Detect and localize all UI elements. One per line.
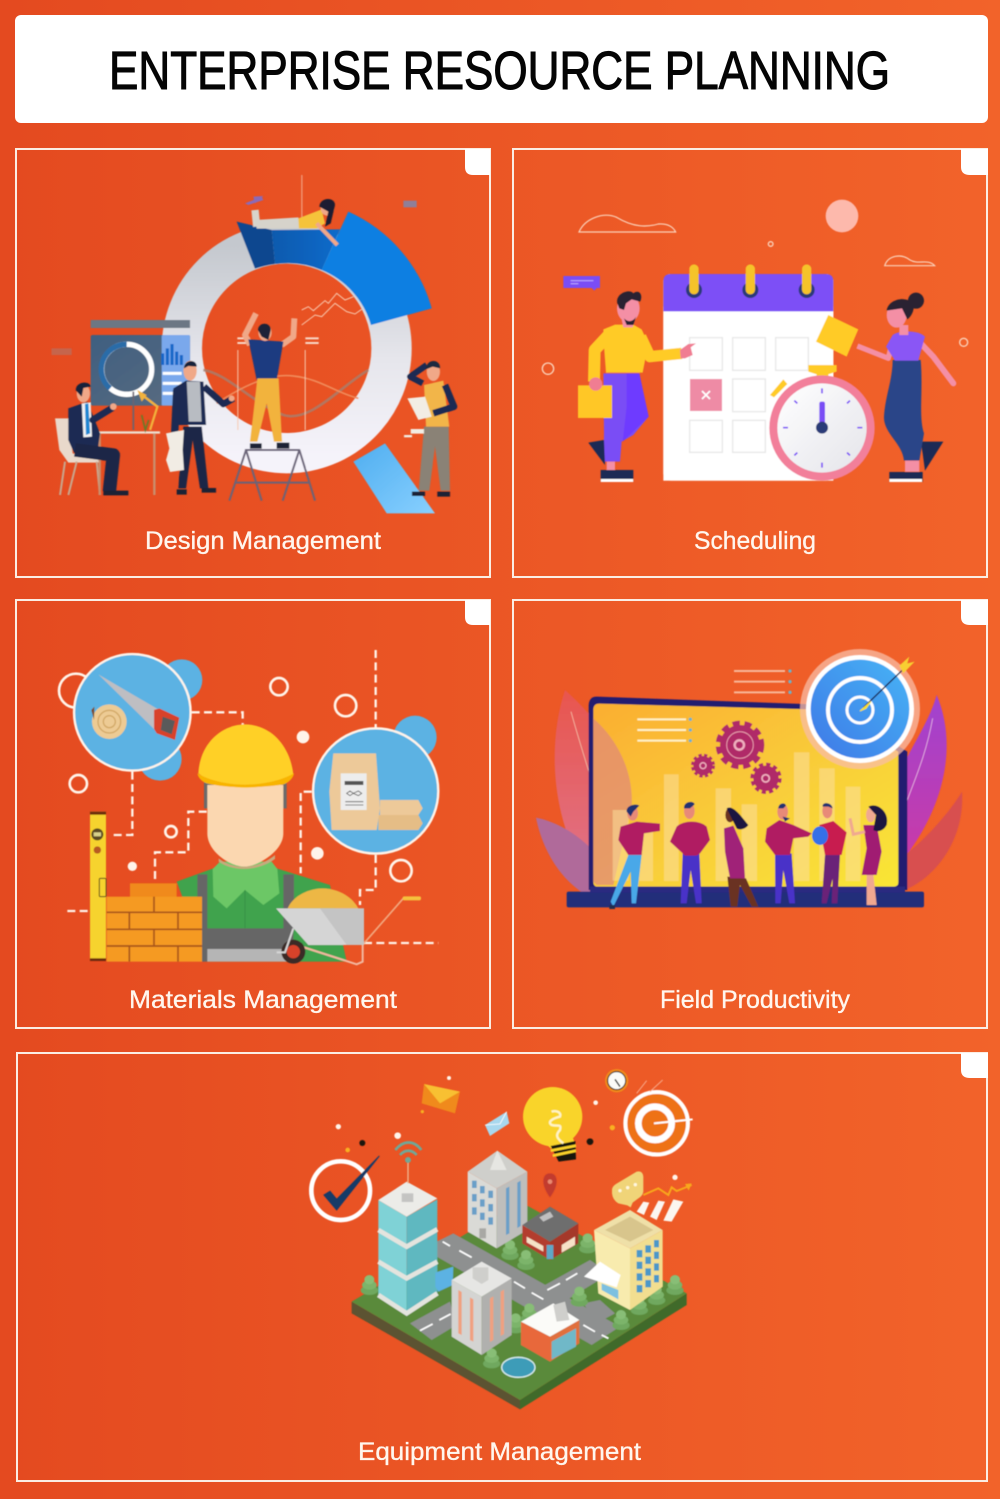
step ladder — [229, 450, 315, 501]
ground block — [352, 1202, 687, 1409]
growth bars and arrow — [637, 1183, 692, 1222]
worker — [177, 724, 347, 962]
bricks — [107, 883, 202, 962]
panel: design management — [16, 149, 490, 577]
checkmark icon — [311, 1156, 379, 1220]
team of people — [609, 802, 887, 909]
illustration: construction worker — [59, 650, 438, 964]
panel: scheduling — [513, 149, 988, 577]
person 2 — [670, 802, 710, 903]
man with folder — [578, 291, 696, 482]
grey tower — [468, 1151, 527, 1248]
illustration: magnifier with team — [52, 175, 454, 513]
line chart — [203, 293, 368, 416]
saw and log circle — [74, 654, 202, 781]
label: scheduling: Scheduling — [694, 527, 816, 555]
large envelope — [422, 1084, 460, 1113]
illustration: calendar and stopwatch — [542, 200, 968, 482]
woman with note — [816, 293, 953, 482]
small envelope — [485, 1112, 509, 1136]
clock — [605, 1069, 628, 1092]
magnifier ring — [182, 243, 391, 453]
yellow hotel — [584, 1210, 663, 1310]
red shop — [522, 1207, 578, 1260]
illustration: isometric smart city — [311, 1069, 693, 1409]
speech bubble — [563, 276, 600, 291]
panel: materials management — [16, 600, 490, 1028]
label: equipment management: Equipment Management — [358, 1438, 641, 1466]
dashboard screen — [91, 320, 190, 406]
target icon — [625, 1080, 693, 1155]
man reading paper — [404, 361, 454, 497]
label: design management: Design Management — [145, 527, 381, 555]
cement bags circle — [313, 716, 438, 854]
roads — [410, 1233, 620, 1345]
chat bubble — [612, 1171, 643, 1207]
label: field productivity: Field Productivity — [660, 986, 850, 1014]
teal glass tower — [378, 1160, 437, 1314]
panel: field productivity — [513, 600, 988, 1028]
trees — [361, 1233, 684, 1368]
dashed connectors — [67, 650, 438, 943]
stopwatch — [769, 365, 875, 481]
orange office — [521, 1302, 579, 1362]
spirit level — [90, 812, 106, 961]
person 4 — [765, 803, 812, 903]
pond — [502, 1357, 535, 1377]
seated man — [68, 383, 128, 495]
leaves — [536, 690, 962, 903]
decorative rings and dots — [59, 674, 412, 881]
title banner — [15, 15, 988, 123]
person 3 — [724, 808, 758, 907]
gears — [692, 723, 780, 792]
front grey tower — [452, 1262, 512, 1355]
chair and desk — [55, 390, 160, 495]
confetti — [336, 1076, 678, 1180]
illustration: team at laptop with target — [536, 649, 962, 909]
wifi icon — [395, 1142, 421, 1162]
laptop — [567, 669, 924, 907]
target with arrow — [800, 649, 920, 769]
wheelbarrow — [276, 888, 421, 964]
person 1 — [609, 805, 660, 909]
label: materials management: Materials Management — [129, 986, 397, 1014]
woman lying on ring — [245, 196, 337, 245]
light bulb — [523, 1087, 582, 1162]
man on ladder — [245, 313, 294, 449]
standing man in suit — [166, 361, 235, 495]
map pin — [543, 1173, 557, 1197]
panel: equipment management — [17, 1053, 988, 1481]
sun and clouds — [542, 200, 968, 374]
person 6 — [850, 805, 887, 905]
calendar — [663, 264, 833, 481]
person 5 — [812, 803, 847, 903]
small blue billboard — [435, 1267, 453, 1292]
